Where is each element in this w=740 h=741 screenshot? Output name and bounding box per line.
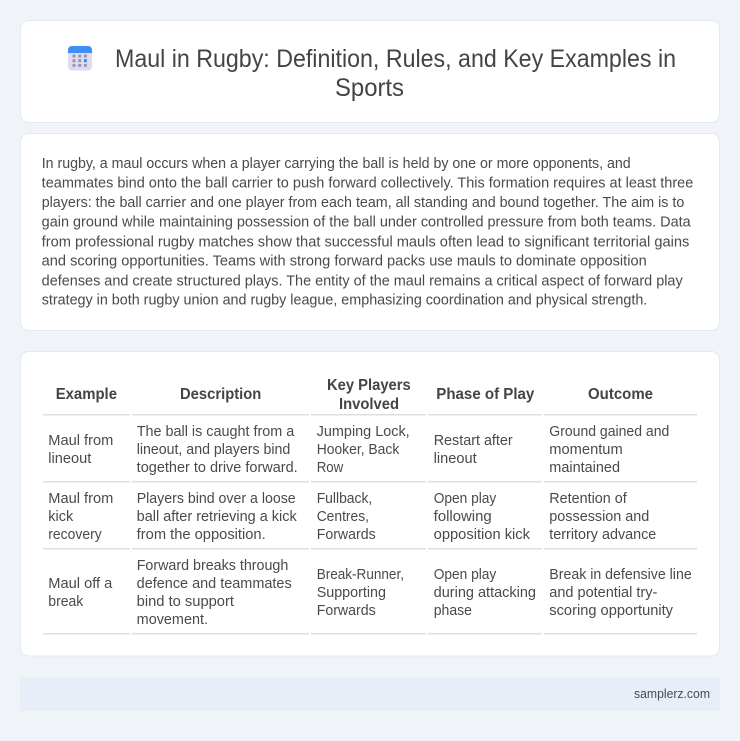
table row: maul off a break: Break-Runner, bbox=[317, 567, 404, 583]
panel: examples table card bbox=[20, 352, 720, 656]
text block: definition: gain ground while maintaining possession of the ball under controlled pressure from both teams. Data bbox=[42, 214, 691, 230]
table row: maul from lineout: together to drive forward. bbox=[137, 460, 298, 476]
table row: maul from kick recovery: following bbox=[434, 509, 492, 525]
table row: maul from lineout: Jumping Lock, bbox=[317, 424, 410, 440]
table row: maul from kick recovery: recovery bbox=[48, 527, 102, 543]
table header row bbox=[56, 377, 653, 413]
table row: maul off a break bbox=[48, 558, 692, 628]
table row: maul off a break: scoring opportunity bbox=[549, 603, 674, 619]
table row: maul from kick recovery: ball after retrieving a kick bbox=[137, 509, 297, 525]
text block: definition: strategy in both rugby union and rugby league, emphasizing coordination and physical strength. bbox=[42, 292, 647, 308]
footer text: source: samplerz.com bbox=[634, 686, 710, 701]
title bbox=[115, 45, 676, 102]
table row: maul from kick recovery: Centres, bbox=[317, 509, 369, 525]
table row: maul from kick recovery: from the opposition. bbox=[137, 527, 266, 543]
table row: maul from kick recovery: Forwards bbox=[317, 527, 376, 543]
table row: maul from lineout: Row bbox=[317, 460, 344, 476]
table row: maul off a break: and potential try- bbox=[549, 585, 657, 601]
table row: maul from lineout bbox=[48, 424, 669, 476]
table row: maul off a break: Forward breaks through bbox=[137, 558, 288, 574]
table row: maul from kick recovery: Retention of bbox=[549, 491, 628, 507]
text block: definition: and scoring opportunities. Teams with strong forward packs use mauls to dominate opposition bbox=[42, 254, 647, 270]
table row: maul off a break: bind to support bbox=[137, 594, 234, 610]
panel: title card bbox=[20, 20, 720, 122]
table row: maul from lineout: momentum bbox=[549, 442, 623, 458]
header: Phase of Play: Phase of Play bbox=[436, 386, 534, 403]
text block: definition: In rugby, a maul occurs when a player carrying the ball is held by one or more opponents, and bbox=[42, 156, 631, 172]
table row: maul from kick recovery: territory advance bbox=[549, 527, 656, 543]
table row: maul from lineout: The ball is caught from a bbox=[137, 424, 294, 440]
table row: maul off a break: Supporting bbox=[317, 585, 386, 601]
table row: maul from kick recovery bbox=[48, 491, 656, 543]
table row: maul off a break: phase bbox=[434, 603, 472, 619]
table row: maul from lineout: Ground gained and bbox=[549, 424, 669, 440]
panel: definition paragraph card bbox=[20, 134, 720, 330]
text block: definition: defenses and create structured plays. The entity of the maul remains a critical aspect of forward play bbox=[42, 274, 684, 290]
table row: maul from kick recovery: Players bind over a loose bbox=[137, 491, 296, 507]
table row: maul from kick recovery: Open play bbox=[434, 491, 497, 507]
header: Key Players Involved bbox=[327, 377, 411, 413]
table row: maul from lineout: Maul from bbox=[48, 433, 113, 449]
title: Maul in Rugby: Definition, Rules, and Key Examples in bbox=[115, 45, 676, 73]
table row: maul from lineout: maintained bbox=[549, 460, 620, 476]
table row: maul from kick recovery: opposition kick bbox=[434, 527, 531, 543]
table row: maul from kick recovery: possession and bbox=[549, 509, 649, 525]
table row: maul from kick recovery: kick bbox=[48, 509, 74, 525]
table row: maul off a break: movement. bbox=[137, 612, 208, 628]
table row: maul off a break: Forwards bbox=[317, 603, 376, 619]
footer bar bbox=[20, 677, 720, 711]
header: Example: Example bbox=[56, 386, 117, 403]
table row: maul off a break: defence and teammates bbox=[137, 576, 292, 592]
table row: maul off a break: during attacking bbox=[434, 585, 536, 601]
table row: maul off a break: Open play bbox=[434, 567, 497, 583]
title: Sports bbox=[335, 74, 404, 102]
table row: maul from lineout: Hooker, Back bbox=[317, 442, 400, 458]
table row: maul off a break: break bbox=[48, 594, 84, 610]
header: Key Players Involved: Involved bbox=[339, 396, 399, 413]
table row: maul from kick recovery: Maul from bbox=[48, 491, 113, 507]
header: Key Players Involved: Key Players bbox=[327, 377, 411, 394]
text block: definition bbox=[42, 156, 693, 308]
text block: definition: from professional rugby matches show that successful mauls often lead to significant territorial gains bbox=[42, 234, 689, 250]
table row: maul from lineout: lineout, and players bind bbox=[137, 442, 290, 458]
header: Outcome: Outcome bbox=[588, 386, 653, 403]
text block: definition: teammates bind onto the ball carrier to push forward collectively. This formation requires at least three bbox=[42, 176, 693, 192]
text block: definition: players: the ball carrier and one player from each team, all standing and bound together. The aim is to bbox=[42, 195, 684, 211]
icon: calendar bbox=[68, 46, 92, 70]
table row: maul from lineout: lineout bbox=[434, 451, 477, 467]
header: Description: Description bbox=[180, 386, 261, 403]
table row: maul off a break: Break in defensive line bbox=[549, 567, 692, 583]
table row: maul off a break: Maul off a bbox=[48, 576, 112, 592]
table row: maul from lineout: Restart after bbox=[434, 433, 513, 449]
table row: maul from kick recovery: Fullback, bbox=[317, 491, 372, 507]
table row: maul from lineout: lineout bbox=[48, 451, 91, 467]
